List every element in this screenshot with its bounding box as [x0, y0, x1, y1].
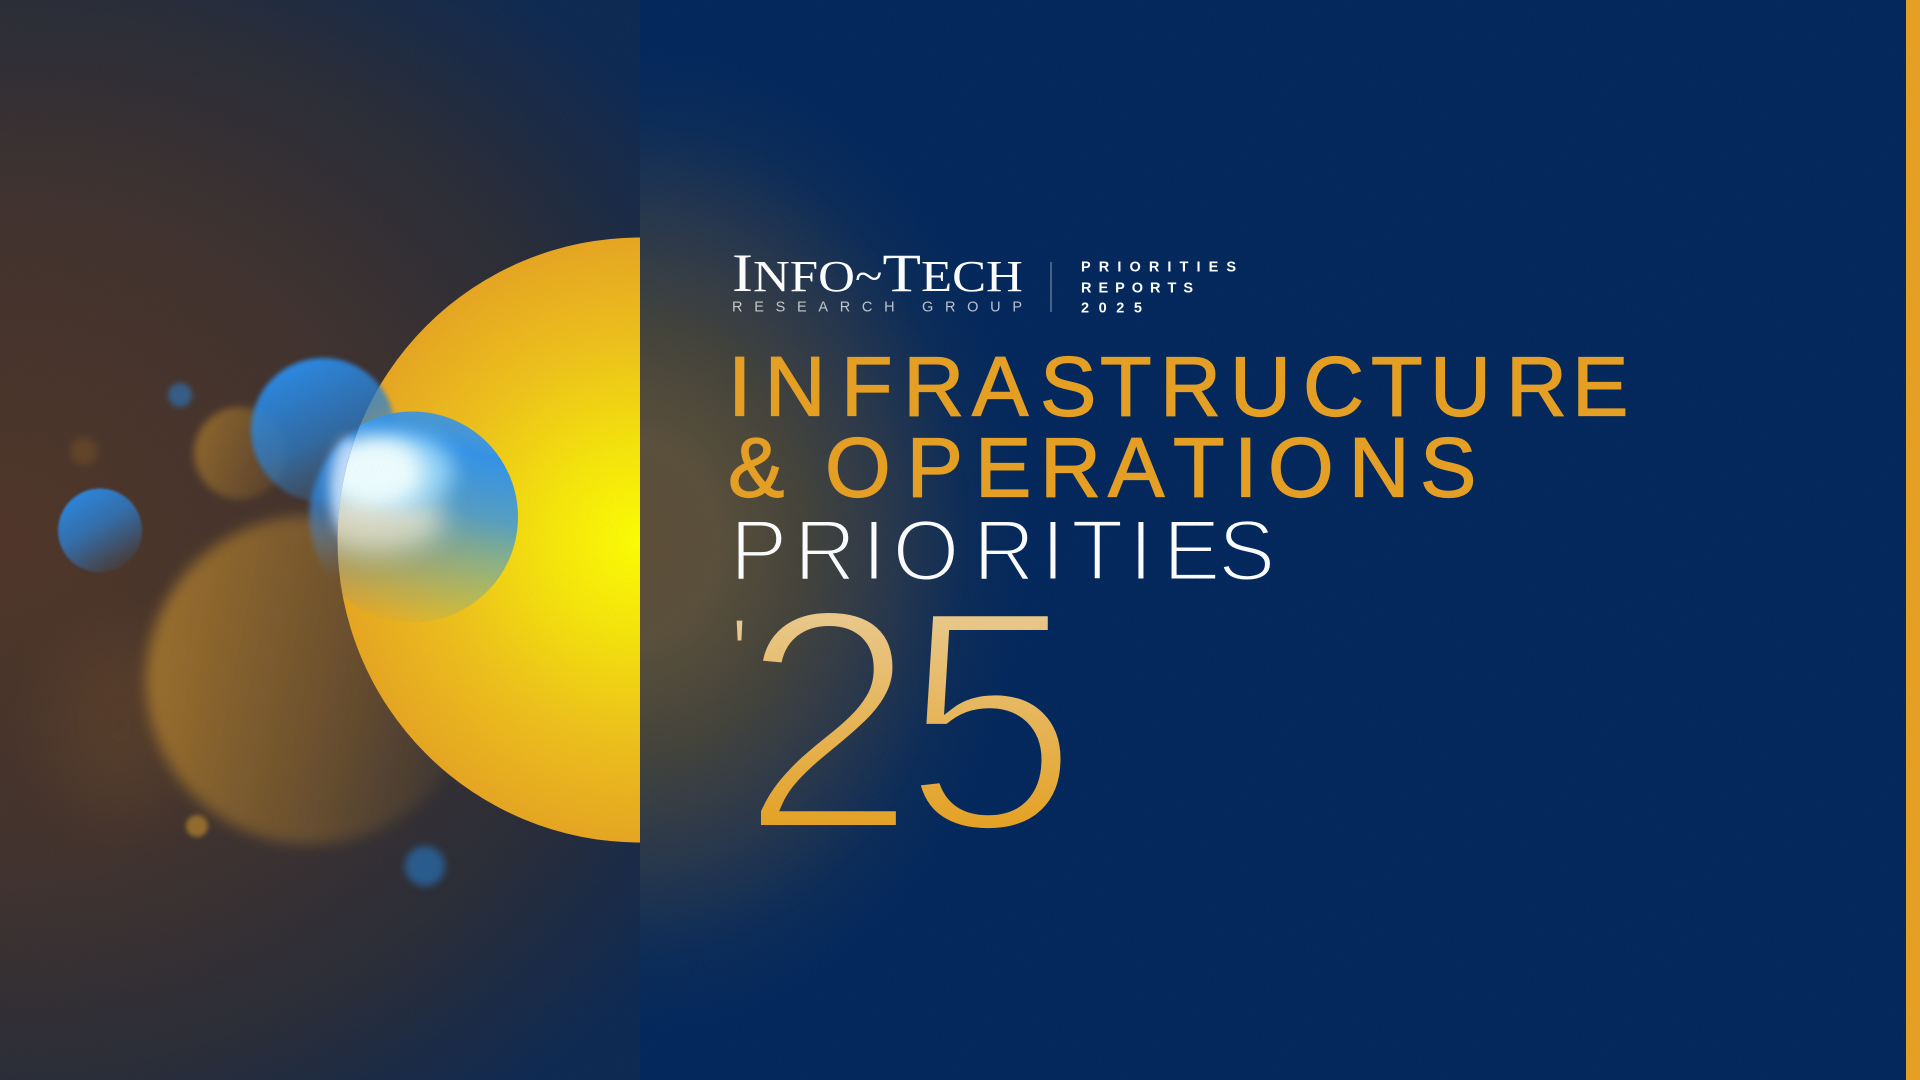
small blurred gold sphere — [194, 407, 286, 499]
right accent bar — [1906, 0, 1920, 1080]
highlight: white core — [320, 436, 424, 508]
logo wordmark: INFO~TECH — [732, 243, 1023, 303]
faint gold dot — [70, 437, 98, 465]
year: '25: ' — [729, 596, 750, 718]
title line: infrastructure: INFRASTRUCTURE — [728, 339, 1628, 433]
report label — [1081, 260, 1236, 316]
logo divider — [1050, 262, 1052, 312]
half sun — [337, 238, 640, 842]
title line: and operations: & OPERATIONS — [728, 421, 1476, 515]
sphere part over sun — [338, 412, 518, 622]
report label: 2025 — [1081, 300, 1142, 316]
title — [730, 356, 1626, 580]
logo tagline: RESEARCH GROUP — [732, 300, 1022, 316]
highlight: light blue halo — [362, 436, 454, 508]
report label: REPORTS — [1081, 280, 1193, 296]
small blue dot — [168, 383, 192, 407]
left blue sphere — [58, 488, 142, 572]
top blue sphere — [251, 358, 395, 502]
bottom blue dot — [405, 846, 445, 886]
large blurred gold sphere — [50, 516, 474, 844]
title line: priorities: PRIORITIES — [730, 503, 1275, 599]
logo: Info-Tech Research Group — [732, 243, 1023, 316]
report label: PRIORITIES — [1081, 260, 1236, 276]
highlight: cream lower glow — [308, 486, 444, 550]
small gold dot — [186, 815, 208, 837]
illustration: spheres and half sun — [50, 238, 640, 886]
year: '25: 25 — [740, 543, 1079, 898]
main glass sphere — [307, 412, 518, 622]
year: '25 — [736, 613, 1060, 828]
sphere part outside sun — [306, 425, 360, 574]
